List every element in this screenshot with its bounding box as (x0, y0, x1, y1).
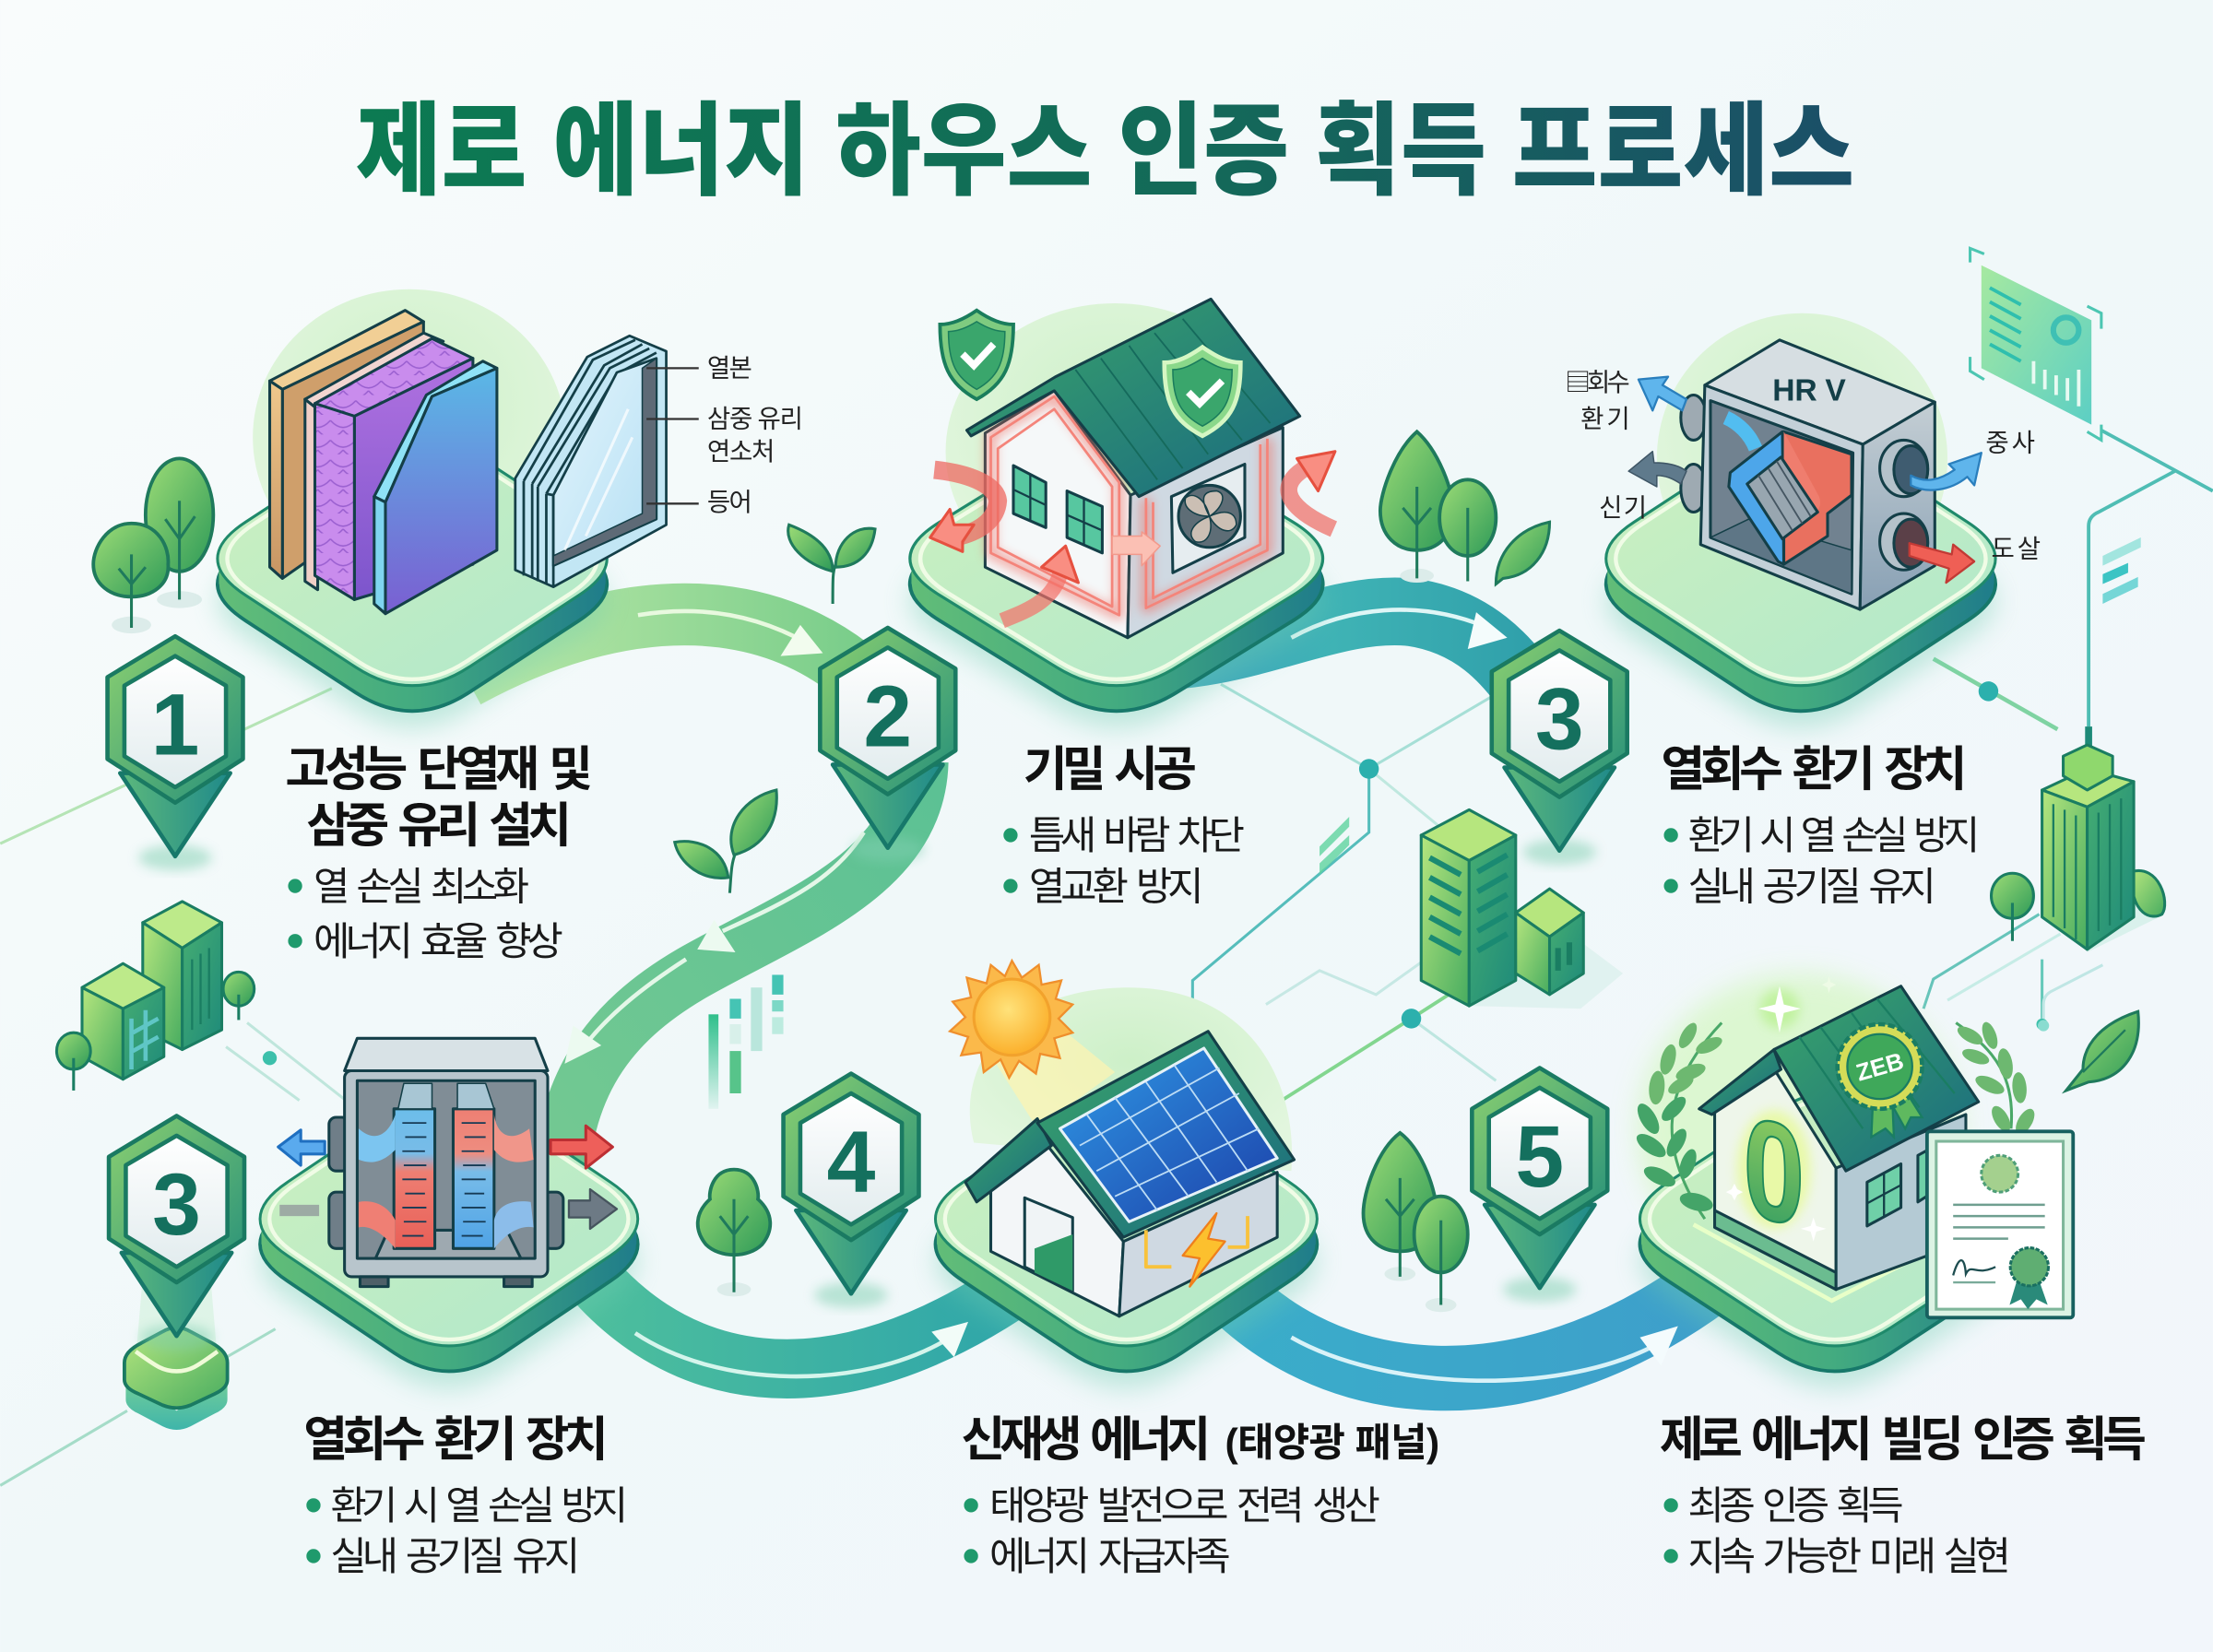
callouts: window labels: 연소처 (707, 437, 775, 466)
pin: step 3 top (1492, 631, 1627, 865)
text block: step 2: 틈새 바람 차단 (1029, 814, 1245, 858)
red airtight seal lines (991, 396, 1267, 615)
flow ribbon: step 2 to 3 (1129, 609, 1538, 705)
platform and halo: step 2 (910, 303, 1323, 728)
icon: ZEB badge: ZEB (1853, 1047, 1907, 1087)
text block: step 5: 지속 가능한 미래 실현 (1687, 1535, 2011, 1579)
text block: step 3 bottom: 환기 시 열 손실 방지 (330, 1484, 628, 1528)
pin: step 3 bottom: 3 (152, 1156, 201, 1254)
windows (1013, 466, 1102, 553)
text block: step 2: 기밀 시공 (1024, 743, 1197, 796)
tree near pin 4 (698, 1170, 770, 1296)
icon: triple glazed window (515, 336, 667, 587)
text block: step 2 (1003, 743, 1245, 909)
platform inner glow line (1694, 1224, 1934, 1301)
arrows and labels: HRV airflow: 환기 (1580, 405, 1630, 433)
text block: step 1: 고성능 단열재 및 (285, 743, 593, 796)
callouts: window labels: 삼중 유리 (707, 405, 803, 433)
platform and halo: step 3 top (1606, 313, 1995, 728)
icon: insulation layers (270, 311, 497, 614)
text block: step 1: 열 손실 최소화 (314, 865, 529, 909)
icon: skyscraper (1992, 745, 2165, 952)
icon: shield left (940, 311, 1013, 399)
callouts: window labels: 등어 (707, 488, 752, 516)
text block: step 4: 태양광 발전으로 전력 생산 (989, 1484, 1380, 1528)
pedestal under pin 3 (124, 1277, 228, 1430)
HRV label: HR V (1772, 374, 1846, 408)
icon: sprout on ribbon (675, 790, 776, 893)
text block: step 1: 삼중 유리 설치 (306, 800, 572, 854)
text block: step 5: 최종 인증 획득 (1687, 1484, 1904, 1528)
roof ribs (1075, 319, 1271, 479)
core (1726, 418, 1852, 564)
flow ribbon: step 4 to 5 (1200, 1256, 1736, 1381)
left ports (1681, 395, 1706, 513)
icon: center office buildings (1421, 809, 1623, 1009)
platform: heat recovery unit (260, 1092, 638, 1388)
text block: step 5: 제로 에너지 빌딩 인증 획득 (1660, 1413, 2147, 1467)
flow ribbon: step 3 to 4 (564, 1242, 1030, 1376)
ZEB green glow (1637, 974, 1961, 1284)
pin: step 1: 1 (151, 677, 199, 774)
pin: step 4 (784, 1074, 918, 1308)
pin: step 1 (108, 636, 243, 870)
holographic dashboard panel (1970, 248, 2101, 440)
title: 제로 에너지 하우스 인증 획득 프로세스 (356, 95, 1854, 208)
text block: step 3 top: 열회수 환기 장치 (1661, 743, 1967, 796)
platform and halo: solar house (935, 987, 1317, 1388)
text block: step 4: 에너지 자급자족 (989, 1535, 1231, 1579)
icon: sun (950, 961, 1115, 1128)
icon: ZEB badge (1838, 1024, 1923, 1137)
arrows and labels: HRV airflow: 신기 (1599, 493, 1647, 522)
icon: ZEB house (1699, 986, 1979, 1290)
text block: step 2: 열교환 방지 (1029, 865, 1204, 909)
pin: step 4: 4 (827, 1114, 876, 1211)
text block: step 1: 에너지 효율 향상 (314, 920, 563, 964)
text block: step 4: 신재생 에너지 (961, 1413, 1211, 1467)
side ports (329, 1117, 563, 1248)
text block: step 4: (태양광 패널) (1225, 1421, 1439, 1465)
network connector lines (0, 431, 2213, 1485)
electric arrows (1146, 1216, 1248, 1267)
pin: step 3 bottom (109, 1115, 244, 1351)
tree group: right of step 2 (1380, 431, 1550, 584)
pin: step 2 (820, 628, 955, 862)
flow ribbon: step 1 to 2 (466, 611, 889, 705)
exchanger columns (359, 1083, 534, 1248)
callouts: window labels: 열본 (707, 354, 752, 383)
house walls (985, 391, 1283, 638)
arrows: air leakage (930, 452, 1335, 620)
platform: ZEB house (1639, 1092, 2030, 1388)
platform and halo: step 1 (218, 289, 607, 728)
arrows and labels: HRV airflow: ▤회수 (1565, 368, 1630, 396)
text block: step 3 top: 실내 공기질 유지 (1687, 865, 1936, 909)
pin: step 2: 2 (863, 668, 912, 766)
arrows and labels: HRV airflow: 중사 (1985, 429, 2035, 457)
pin: step 5: 5 (1515, 1108, 1564, 1206)
icon: certificate (1927, 1131, 2073, 1317)
icon: HRV unit (1681, 340, 1935, 609)
fan unit (1171, 464, 1245, 572)
icon: shield on roof (1165, 347, 1240, 436)
text block: step 1 (285, 743, 593, 964)
icon: laurel wreath (1633, 1021, 2039, 1219)
arrows and labels: HRV airflow: 도살 (1992, 534, 2041, 562)
icon: sparkles (1726, 976, 1836, 1242)
flow ribbon: step 2 to heat recovery unit (559, 761, 920, 1199)
seal outline (991, 396, 1267, 615)
arrows: unit airflow (278, 1126, 617, 1229)
decorative data bars (708, 537, 2141, 1109)
arrows and labels: HRV airflow (1565, 368, 2041, 583)
solar panel (1059, 1048, 1277, 1221)
icon: zero symbol: 0 (1744, 1086, 1805, 1258)
text block: step 3 bottom: 열회수 환기 장치 (303, 1413, 609, 1467)
icon: heat recovery unit (329, 1038, 563, 1287)
icon: left buildings and trees (56, 902, 254, 1091)
lightning bolt (1183, 1213, 1225, 1287)
tree group near pin 5 (1364, 1133, 1468, 1312)
tree group: left of step 1 (93, 458, 213, 633)
text block: step 3 top: 환기 시 열 손실 방지 (1687, 814, 1980, 858)
text block: step 3 bottom (303, 1413, 628, 1579)
icon: sprout near step 2 (788, 525, 875, 604)
pin: step 3 top: 3 (1535, 671, 1584, 769)
text block: step 5 (1660, 1413, 2147, 1579)
roof (966, 299, 1300, 497)
icon: airtight house (966, 299, 1300, 638)
icon: solar house (965, 1032, 1295, 1316)
text block: step 4 (961, 1413, 1439, 1579)
right ports (1880, 440, 1928, 570)
text block: step 3 top (1661, 743, 1980, 909)
icon: leaf (2066, 1011, 2138, 1091)
pin: step 5 (1472, 1068, 1607, 1302)
text block: step 3 bottom: 실내 공기질 유지 (330, 1535, 580, 1579)
callouts: window labels (646, 354, 803, 516)
